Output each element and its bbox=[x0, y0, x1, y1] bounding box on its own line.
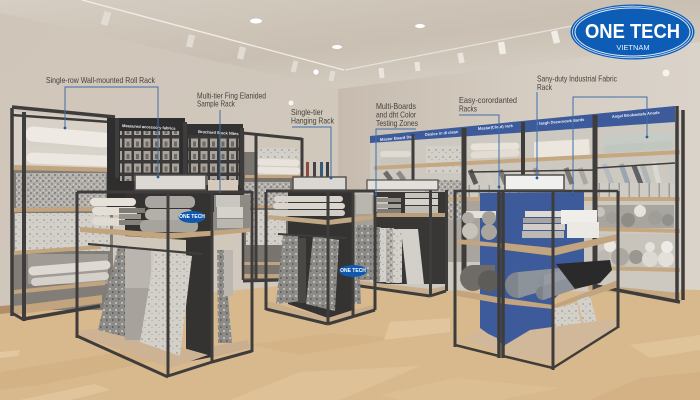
sign box bbox=[367, 180, 438, 190]
label: multi-boards color testing zones bbox=[376, 101, 418, 128]
label: multi-boards color testing zones: and dht Color bbox=[376, 110, 416, 120]
draped fabrics bbox=[276, 225, 374, 311]
label: multi-tier sample rack bbox=[197, 90, 266, 108]
label: heavy-duty industrial fabric rack bbox=[537, 74, 617, 92]
rolled white fabrics bbox=[28, 134, 106, 161]
dark back panel bbox=[288, 192, 352, 318]
label: easy-coordinated racks: Racks bbox=[459, 104, 477, 114]
header band bbox=[370, 106, 675, 143]
callout anchor dots bbox=[64, 127, 648, 196]
lower rolls bbox=[28, 254, 108, 284]
header band: Desice in di clean bbox=[425, 129, 459, 137]
label: multi-boards color testing zones: Testing Zones bbox=[376, 118, 418, 128]
label: multi-tier sample rack: Sample Rack bbox=[197, 98, 236, 108]
frame posts bbox=[413, 106, 683, 302]
left wall bbox=[0, 13, 338, 310]
left track with spotlights bbox=[82, 0, 344, 81]
steel frame bbox=[455, 190, 618, 370]
fabric behind post bbox=[214, 195, 250, 231]
recessed downlights bbox=[250, 18, 262, 24]
bottom shelf bbox=[79, 327, 250, 368]
bottom shelf bbox=[267, 301, 374, 324]
center shelf bbox=[267, 215, 374, 225]
wood shelves bbox=[374, 150, 680, 299]
wood floor bbox=[0, 280, 700, 400]
bottom shelves bbox=[457, 318, 618, 362]
sample board racks bbox=[107, 118, 244, 212]
label: heavy-duty industrial fabric rack: Sany-duty Industrial Fabric bbox=[537, 74, 617, 84]
label: single-tier hanging rack bbox=[291, 107, 335, 126]
top stacks bbox=[462, 210, 599, 240]
label: single-row wall-mounted roll rack: Single-row Wall-mounted Roll Rack bbox=[46, 75, 156, 85]
mid rolls bbox=[460, 260, 612, 300]
logo: one tech vietnam: VIETNAM bbox=[616, 43, 650, 52]
center island rack bbox=[266, 177, 375, 324]
header band: I Iaegh Decorsowk Bards bbox=[537, 117, 585, 126]
patterned fabric panels bbox=[16, 173, 106, 208]
draped fabrics bbox=[98, 246, 233, 356]
panel: fine sample rack one: Measured accessory fabrics bbox=[122, 123, 176, 131]
ceiling bbox=[0, 0, 700, 89]
logo: one tech vietnam bbox=[570, 4, 694, 60]
header band: Master Board Deal bbox=[380, 134, 415, 142]
front right island rack bbox=[455, 175, 618, 370]
blue back panel bbox=[480, 192, 584, 346]
left wall rack bbox=[12, 107, 115, 321]
badge: one tech bbox=[178, 211, 206, 223]
stacked rolls bbox=[94, 195, 243, 232]
upper shelf bbox=[457, 234, 618, 256]
island rack: multi boards bbox=[360, 180, 450, 296]
single tier hanging rack bbox=[243, 133, 332, 281]
frame bbox=[12, 107, 115, 321]
right wall bbox=[338, 42, 700, 292]
label: easy-coordinated racks bbox=[459, 95, 517, 114]
top shelf rolls bbox=[383, 136, 669, 173]
panel: fine sample rack two: Brochard Stock Nites bbox=[198, 129, 240, 136]
hanging tubes bbox=[385, 162, 673, 184]
shelved books bbox=[302, 162, 332, 177]
logo: one tech vietnam: ONE TECH bbox=[585, 21, 680, 43]
sign box bbox=[505, 175, 564, 190]
header band: Angel Bookwatels Anode bbox=[612, 110, 661, 119]
textured swatches bbox=[550, 296, 597, 343]
rolls on hanging rack bbox=[243, 148, 299, 176]
label: easy-coordinated racks: Easy-corordanted bbox=[459, 95, 517, 105]
badge: one tech: ONE TECH bbox=[340, 268, 366, 274]
upper shelf bbox=[80, 227, 250, 239]
right wall rack bbox=[370, 106, 683, 302]
steel frame bbox=[77, 191, 252, 377]
label: single-tier hanging rack: Hanging Rack bbox=[291, 116, 335, 126]
right track with spotlights bbox=[345, 26, 572, 78]
header band: Mastar(Clout) rack bbox=[478, 123, 514, 131]
front left island rack bbox=[77, 175, 252, 377]
sign box bbox=[293, 177, 346, 190]
gray rolls lower shelves bbox=[595, 205, 674, 267]
sign box bbox=[135, 175, 206, 190]
display boards bbox=[373, 227, 424, 284]
label: heavy-duty industrial fabric rack: Rack bbox=[537, 82, 553, 92]
middle shelf bbox=[457, 280, 618, 309]
badge: one tech: ONE TECH bbox=[179, 214, 205, 220]
label: multi-boards color testing zones: Multi-Boards bbox=[376, 101, 416, 111]
wood shelves bbox=[14, 165, 113, 315]
dark back panel bbox=[125, 192, 212, 362]
skirting bbox=[0, 305, 12, 315]
tile samples bbox=[597, 183, 675, 198]
ceiling lights bbox=[82, 0, 670, 106]
callout leader lines bbox=[65, 87, 647, 195]
label: multi-tier sample rack: Multi-tier Fing Elanided bbox=[197, 90, 266, 100]
stacked rolls bbox=[274, 194, 372, 214]
badge: one tech bbox=[339, 265, 367, 277]
label: single-tier hanging rack: Single-tier bbox=[291, 107, 323, 117]
stacked fabrics bbox=[374, 193, 438, 213]
